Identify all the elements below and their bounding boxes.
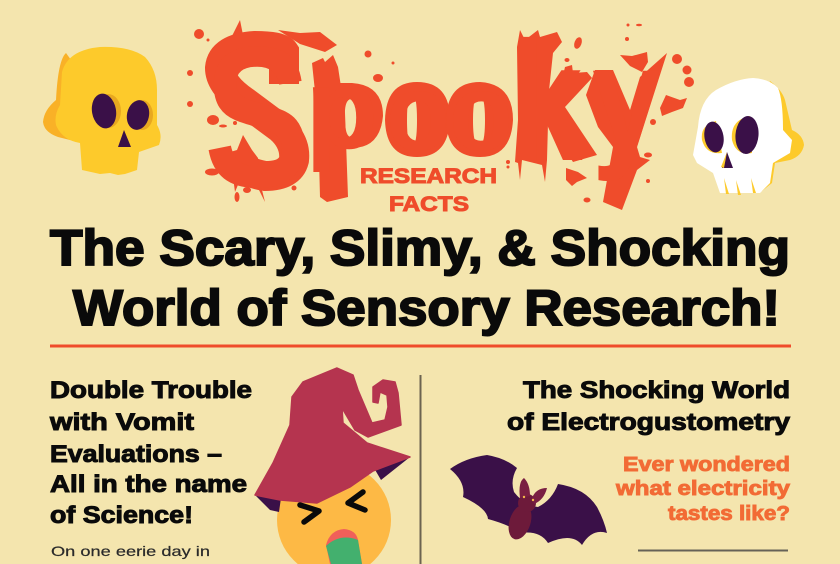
- letter y: y: [592, 15, 662, 183]
- letter p: p: [305, 44, 378, 172]
- main heading: The Scary, Slimy, & Shocking: [50, 220, 790, 276]
- heading: shocking world: of Electrogustometry: [507, 409, 791, 436]
- ink splatter: [187, 24, 694, 202]
- heading: double trouble: [49, 377, 252, 529]
- orange subheading: tastes like?: [668, 503, 790, 525]
- second letter o: o: [449, 51, 513, 174]
- heading: double trouble: of Science!: [50, 502, 193, 529]
- icon: witch face: [255, 368, 410, 564]
- subtitle: research facts: RESEARCH: [360, 165, 497, 188]
- icon: yellow skull: [43, 47, 161, 175]
- heading: double trouble: All in the name: [50, 471, 247, 498]
- title: Spooky: [204, 6, 667, 229]
- heading: shocking world: [507, 377, 791, 436]
- letter k: k: [510, 7, 583, 197]
- main heading: [50, 220, 790, 336]
- short divider: [638, 550, 788, 552]
- letter o: o: [386, 51, 450, 174]
- main heading: World of Sensory Research!: [73, 280, 780, 336]
- icon: bat: [450, 455, 607, 545]
- body text: On one eerie day in: [51, 543, 210, 559]
- subtitle: research facts: FACTS: [389, 193, 469, 216]
- heading: double trouble: with Vomit: [49, 409, 194, 436]
- orange subheading: Ever wondered: [623, 454, 790, 476]
- heading: shocking world: The Shocking World: [523, 377, 790, 404]
- heading: double trouble: Evaluations –: [50, 441, 222, 468]
- orange subheading: [615, 454, 791, 525]
- subtitle: research facts: [360, 165, 497, 216]
- heading: double trouble: Double Trouble: [50, 377, 252, 404]
- column divider: [420, 375, 422, 564]
- icon: white skull: [693, 78, 804, 195]
- orange rule: [50, 344, 791, 348]
- letter S: S: [204, 6, 311, 229]
- orange subheading: what electricity: [615, 478, 791, 500]
